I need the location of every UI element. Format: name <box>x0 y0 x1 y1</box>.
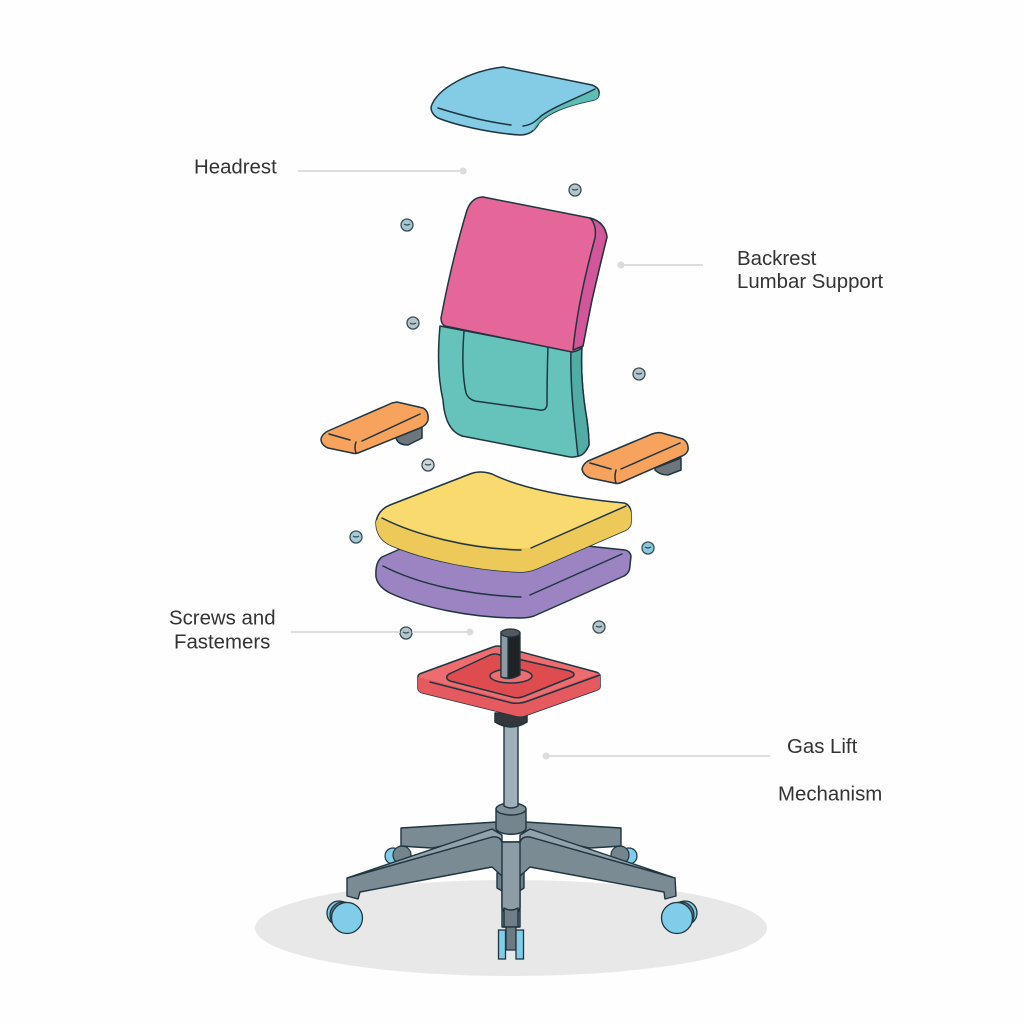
yellow seat cushion <box>376 472 631 572</box>
screws and fasteners <box>350 184 654 639</box>
headrest <box>431 67 599 135</box>
left armrest <box>321 402 428 454</box>
label: gas lift mechanism: Mechanism <box>778 784 882 806</box>
front casters <box>327 901 697 959</box>
mechanism pole <box>501 629 520 679</box>
gas lift cylinder <box>496 725 526 834</box>
rear casters <box>385 846 637 864</box>
chair base <box>347 822 676 927</box>
floor shadow <box>255 880 767 976</box>
purple seat foam <box>376 546 631 618</box>
lumbar support <box>439 326 589 457</box>
label: backrest and lumbar support <box>737 248 884 293</box>
label: screws and fasteners <box>169 608 276 654</box>
label: screws and fasteners: Screws and <box>169 608 276 630</box>
label: headrest: Headrest <box>194 156 277 178</box>
mechanism plate <box>418 646 600 727</box>
leader lines <box>291 168 770 760</box>
backrest <box>441 197 607 352</box>
label: backrest and lumbar support: Lumbar Support <box>737 271 884 293</box>
label: backrest and lumbar support: Backrest <box>737 248 817 270</box>
label: gas lift mechanism <box>778 736 882 806</box>
label: screws and fasteners: Fastemers <box>174 632 270 654</box>
label: gas lift mechanism: Gas Lift <box>787 736 858 758</box>
right armrest <box>582 433 688 484</box>
